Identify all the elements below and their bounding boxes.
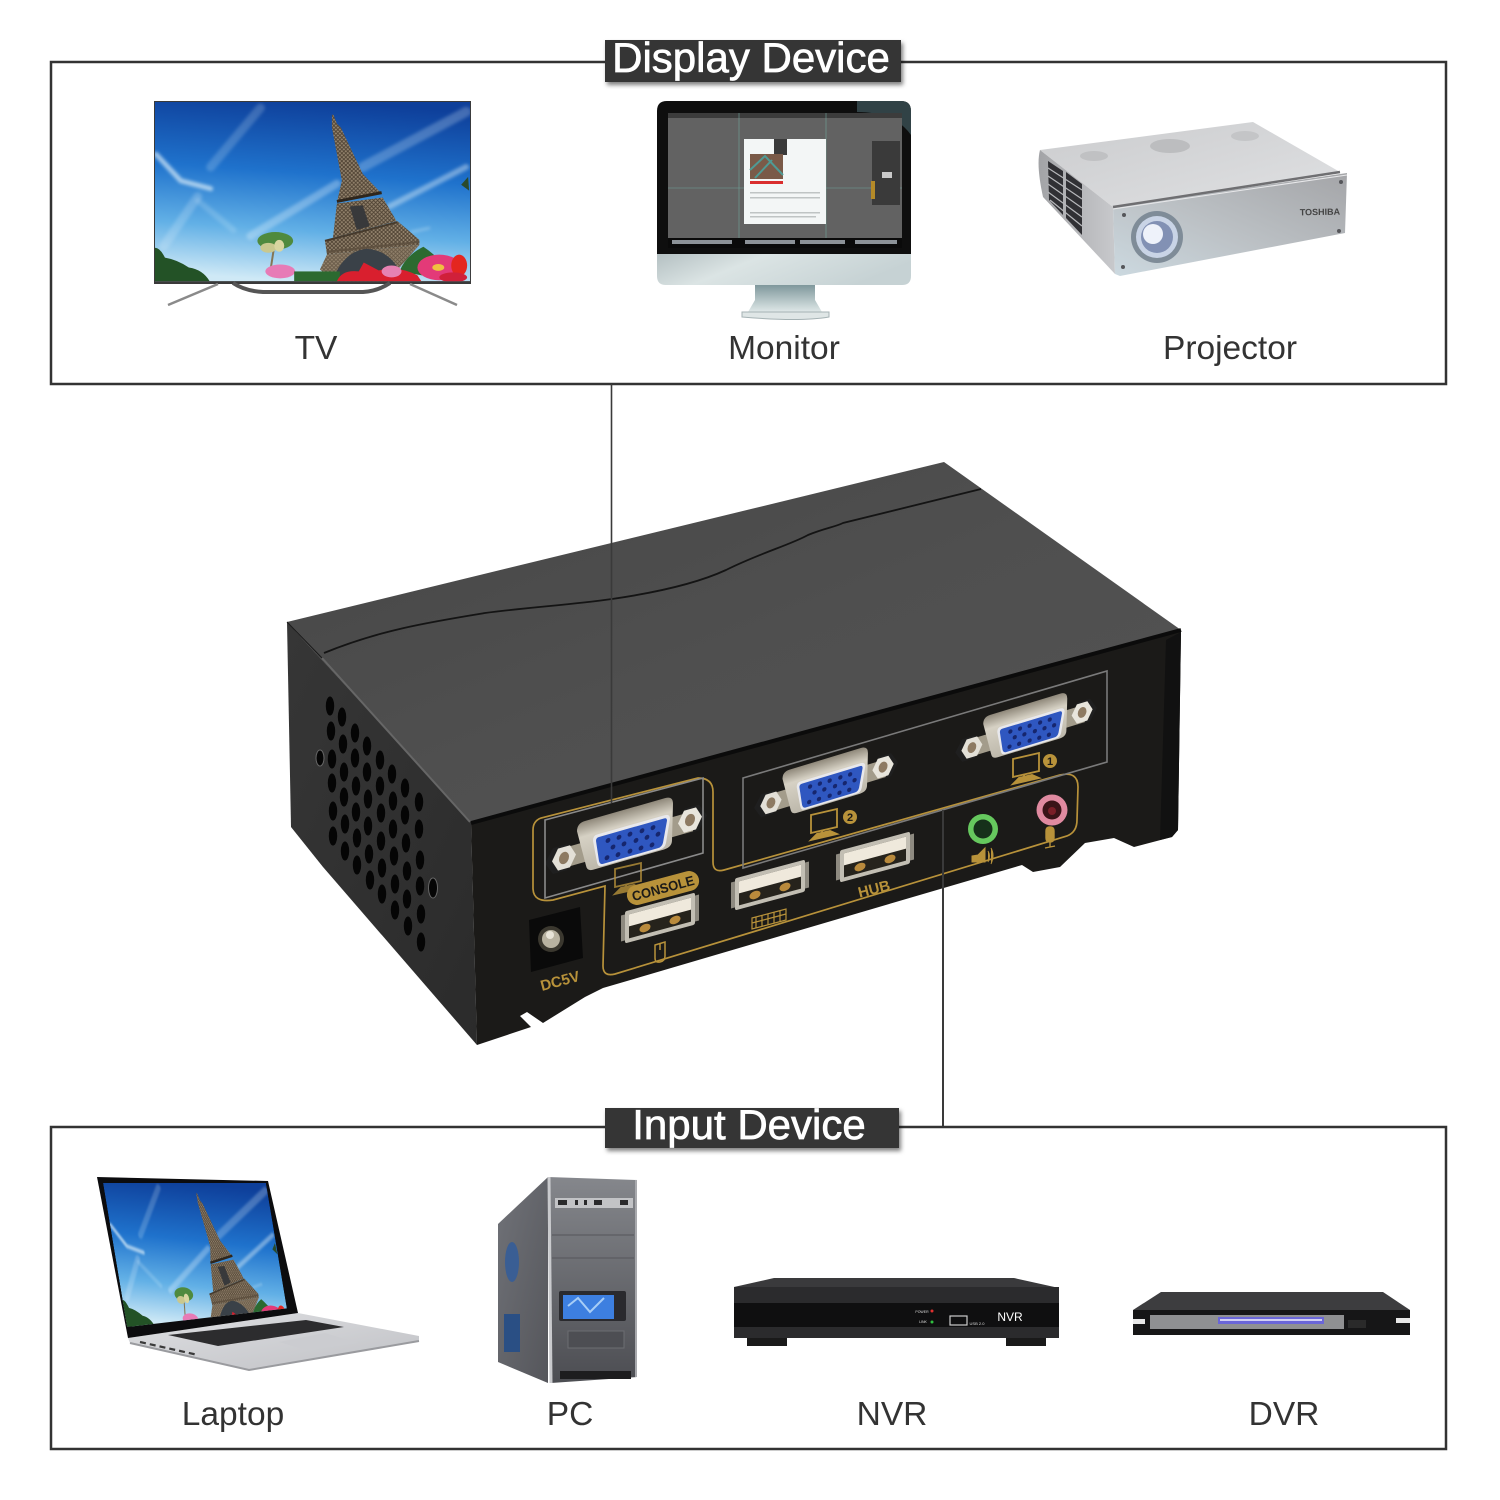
port: DC power jack <box>529 907 583 972</box>
KVM switch device <box>287 462 1181 1045</box>
panel: input device <box>51 1101 1446 1449</box>
icon: microphone <box>1045 827 1055 848</box>
connector line: input device to hub <box>942 810 944 1127</box>
box: front face <box>471 630 1181 1045</box>
box: left vented side <box>287 622 477 1045</box>
panel: display device <box>51 34 1446 384</box>
label: DVR: DVR <box>1249 1396 1319 1433</box>
icon: NVR: LINK <box>919 1320 928 1324</box>
icon: monitor <box>657 101 911 320</box>
icon: monitor 2 <box>811 809 857 840</box>
connector line: display device to console port <box>610 384 612 803</box>
icon: mouse <box>655 942 665 962</box>
port: microphone <box>1036 794 1068 826</box>
port: mouse USB <box>621 891 699 945</box>
icon: keyboard <box>752 909 786 929</box>
box: top face <box>287 462 1181 823</box>
icon: PC tower <box>498 1177 637 1383</box>
icon: speaker <box>972 848 993 864</box>
port outlines: console <box>545 778 703 898</box>
box: front top edge and right cap <box>471 630 1181 840</box>
icon: DVR <box>1133 1292 1410 1335</box>
heading: input device: Input Device <box>632 1101 866 1148</box>
icon: projector: TOSHIBA <box>1300 207 1341 217</box>
icon: console monitor <box>615 863 641 894</box>
label: DC5V: DC5V <box>539 968 582 995</box>
label: console: CONSOLE <box>630 873 696 904</box>
label: projector: Projector <box>1163 330 1297 367</box>
label: laptop: Laptop <box>182 1396 284 1433</box>
label: HUB: HUB <box>856 877 892 902</box>
port: VGA 1 <box>955 683 1097 770</box>
icon: monitor 2: 2 <box>847 812 853 824</box>
port: keyboard USB <box>731 858 809 912</box>
icon: projector <box>1039 122 1347 276</box>
label: monitor: Monitor <box>728 330 840 367</box>
icon: monitor 1: 1 <box>1047 756 1053 768</box>
icon: monitor 1 <box>1013 753 1057 784</box>
port: VGA 2 <box>754 737 898 826</box>
gold outline: video ports <box>533 774 1078 975</box>
icon: NVR: POWER <box>915 1310 929 1314</box>
label: PC: PC <box>547 1396 593 1433</box>
port: console VGA <box>545 786 707 883</box>
icon: NVR: NVR <box>997 1310 1023 1324</box>
icon: NVR <box>734 1278 1059 1346</box>
port: hub USB <box>836 830 914 884</box>
label: TV: TV <box>295 330 338 367</box>
icon: laptop <box>97 1177 419 1370</box>
port outlines: outputs <box>743 671 1107 868</box>
heading: display device: Display Device <box>612 34 890 81</box>
port: audio out <box>968 814 998 844</box>
icon: NVR: USB 2.0 <box>970 1321 985 1326</box>
label: NVR: NVR <box>857 1396 927 1433</box>
icon: TV <box>154 101 471 305</box>
